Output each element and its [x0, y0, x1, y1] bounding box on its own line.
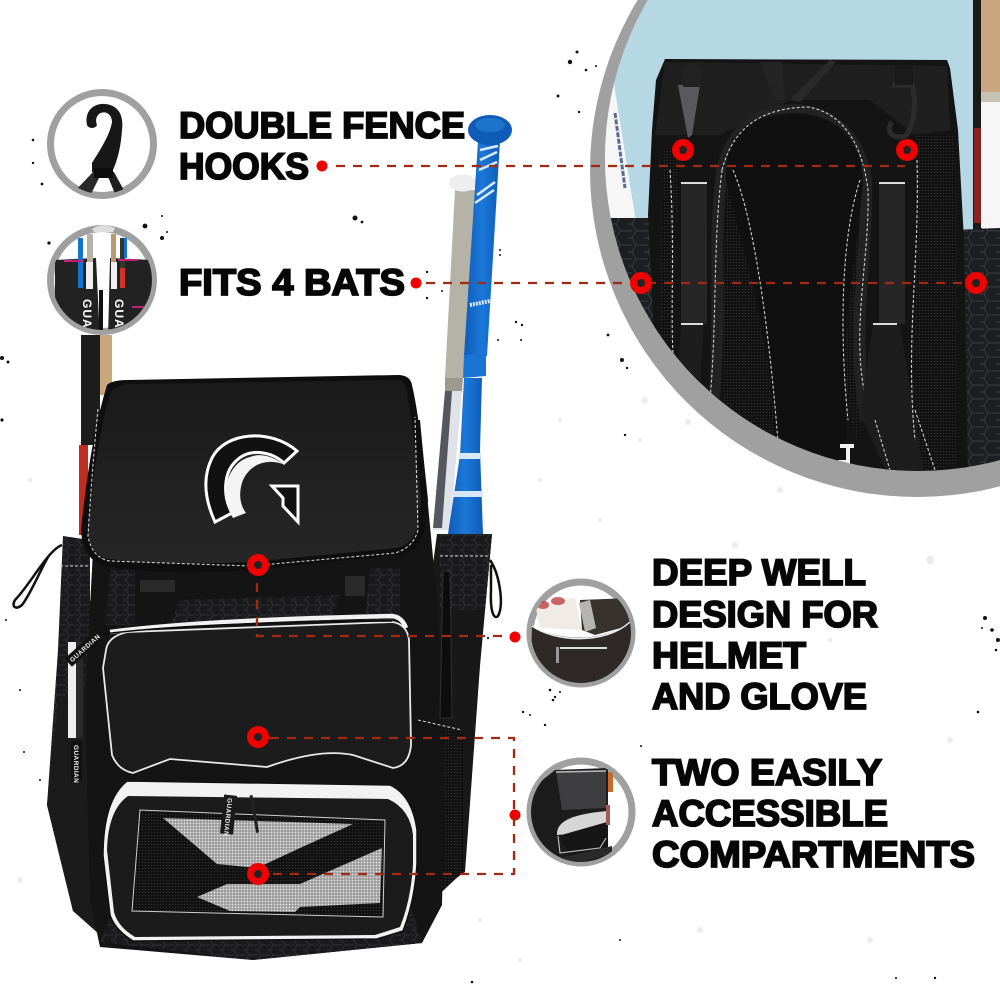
heading: deep well: AND GLOVE	[652, 676, 867, 717]
icon circle: four bats: GUARD	[112, 299, 126, 348]
callout line: double fence hooks	[316, 160, 905, 172]
icon circle: fence hook	[50, 92, 154, 196]
heading: fits 4 bats: FITS 4 BATS	[179, 262, 405, 303]
red ring markers	[250, 142, 984, 882]
heading: double fence hooks: DOUBLE FENCE	[179, 105, 465, 146]
lower pocket	[103, 781, 417, 941]
side pockets and body	[47, 420, 492, 960]
side pockets	[596, 218, 1000, 480]
shoulder strap arch	[714, 110, 866, 420]
top flap	[81, 375, 428, 572]
heading: deep well: HELMET	[652, 635, 806, 676]
shoulder strap webbing	[670, 60, 940, 480]
helmet logo	[206, 436, 298, 522]
callout line: compartments	[270, 738, 520, 874]
heading: two easily accessible compartments	[652, 752, 975, 875]
heading: deep well	[652, 552, 878, 717]
mesh panels	[660, 135, 958, 470]
center back pad	[708, 107, 868, 480]
drawcord loop left	[14, 545, 62, 607]
side zipper: GUARDIAN	[69, 633, 102, 664]
inset circle: back of backpack	[590, 0, 1000, 497]
hex band under flap	[105, 565, 405, 632]
heading: double fence hooks: HOOKS	[179, 146, 309, 187]
callout line: fits 4 bats	[410, 278, 965, 288]
bat tips above circle	[92, 225, 115, 232]
icon circle: deep well	[530, 582, 640, 690]
heading: double fence hooks	[179, 105, 465, 187]
drawcord loop right	[490, 560, 501, 617]
bag back panel	[648, 59, 968, 480]
side zipper	[65, 631, 103, 783]
callout line: deep well	[257, 583, 520, 642]
heading: two easily accessible compartments: COMPARTMENTS	[652, 834, 975, 875]
left bat behind bag	[605, 84, 636, 222]
side zipper: GUARDIAN	[72, 745, 79, 783]
right bat behind bag	[973, 0, 1000, 230]
carabiner	[838, 444, 854, 464]
icon circle: four bats	[50, 228, 154, 348]
heading: two easily accessible compartments: TWO EASILY	[652, 752, 882, 793]
icon circle: compartments	[530, 761, 632, 870]
heading: two easily accessible compartments: ACCESSIBLE	[652, 793, 888, 834]
left bat behind main bag	[79, 335, 112, 535]
white bat	[433, 174, 477, 530]
lower pocket: GUARDIAN	[222, 798, 233, 836]
fence hooks on back	[678, 82, 917, 140]
blue bat	[448, 115, 512, 534]
main backpack	[14, 375, 501, 960]
heading: deep well: DEEP WELL	[652, 552, 866, 593]
icon circle: four bats: GUARD	[80, 299, 94, 348]
heading: deep well: DESIGN FOR	[652, 594, 878, 635]
middle pocket	[103, 616, 411, 773]
